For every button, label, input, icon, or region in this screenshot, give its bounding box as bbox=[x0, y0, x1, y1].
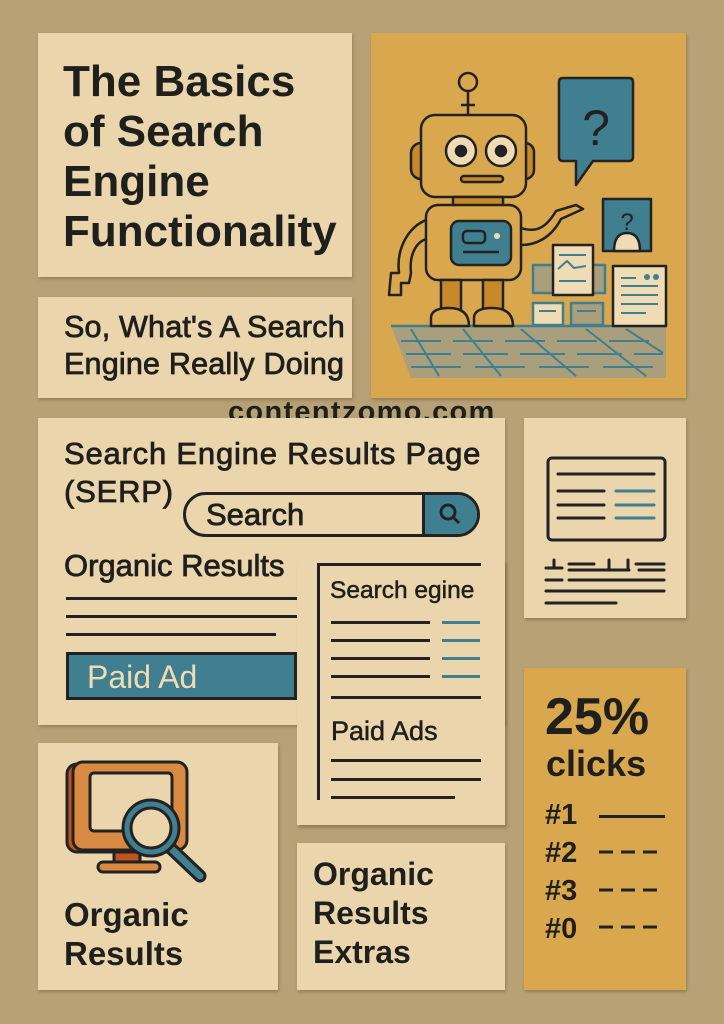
paid ad box: Paid Ad bbox=[87, 659, 197, 695]
SERP heading: Search Engine Results Page bbox=[64, 436, 481, 471]
label: organic results extras: Organic bbox=[313, 856, 434, 892]
title: Engine bbox=[63, 157, 210, 206]
panel: organic results extras bbox=[297, 843, 505, 990]
search bar: Search bbox=[206, 497, 304, 532]
label: organic results extras: Extras bbox=[313, 934, 411, 970]
stat: 25% clicks: 25% bbox=[545, 688, 649, 746]
icon: documents bbox=[533, 245, 666, 326]
panel: SERP bbox=[38, 418, 505, 725]
SERP heading bbox=[64, 436, 481, 509]
panel: robot illustration bbox=[371, 33, 686, 398]
label: organic results: Results bbox=[64, 935, 183, 972]
subtitle: So, What's A Search bbox=[64, 310, 345, 344]
label: organic results extras: Results bbox=[313, 895, 429, 931]
title: of Search bbox=[63, 107, 264, 156]
panel: organic results bbox=[38, 743, 278, 990]
panel: subtitle bbox=[38, 297, 352, 398]
ranking list: #1 bbox=[545, 799, 577, 831]
panel: click stats bbox=[524, 668, 686, 990]
panel: document icon bbox=[524, 418, 686, 618]
icon: question bubble bbox=[559, 78, 633, 185]
title bbox=[63, 57, 337, 256]
title: The Basics bbox=[63, 57, 295, 106]
ranking list bbox=[545, 799, 665, 945]
panel: click stats: clicks bbox=[546, 743, 646, 784]
icon: monitor with magnifier bbox=[66, 760, 206, 882]
icon: profile card bbox=[603, 199, 651, 251]
subtitle bbox=[64, 310, 345, 381]
card heading: Search egine bbox=[330, 577, 474, 604]
label: organic results bbox=[64, 896, 189, 972]
icon: document bbox=[544, 456, 666, 604]
paid ad box bbox=[66, 652, 297, 700]
icon: profile card: ? bbox=[620, 209, 634, 236]
icon: question bubble: ? bbox=[582, 100, 610, 156]
paid ads label: Paid Ads bbox=[331, 716, 438, 746]
organic results heading: Organic Results bbox=[64, 548, 285, 583]
robot bbox=[389, 73, 583, 326]
SERP heading: (SERP) bbox=[64, 474, 174, 509]
title: Functionality bbox=[63, 207, 337, 256]
search bar bbox=[183, 492, 480, 537]
label: organic results extras bbox=[313, 856, 434, 970]
label: organic results: Organic bbox=[64, 896, 189, 933]
site url: contentzomo.com bbox=[228, 396, 496, 428]
floor bbox=[391, 326, 666, 378]
ranking list: #3 bbox=[545, 875, 577, 907]
ranking list: #0 bbox=[545, 913, 577, 945]
subtitle: Engine Really Doing bbox=[64, 347, 344, 381]
panel: title bbox=[38, 33, 352, 277]
panel: search engine card bbox=[297, 560, 505, 825]
ranking list: #2 bbox=[545, 837, 577, 869]
